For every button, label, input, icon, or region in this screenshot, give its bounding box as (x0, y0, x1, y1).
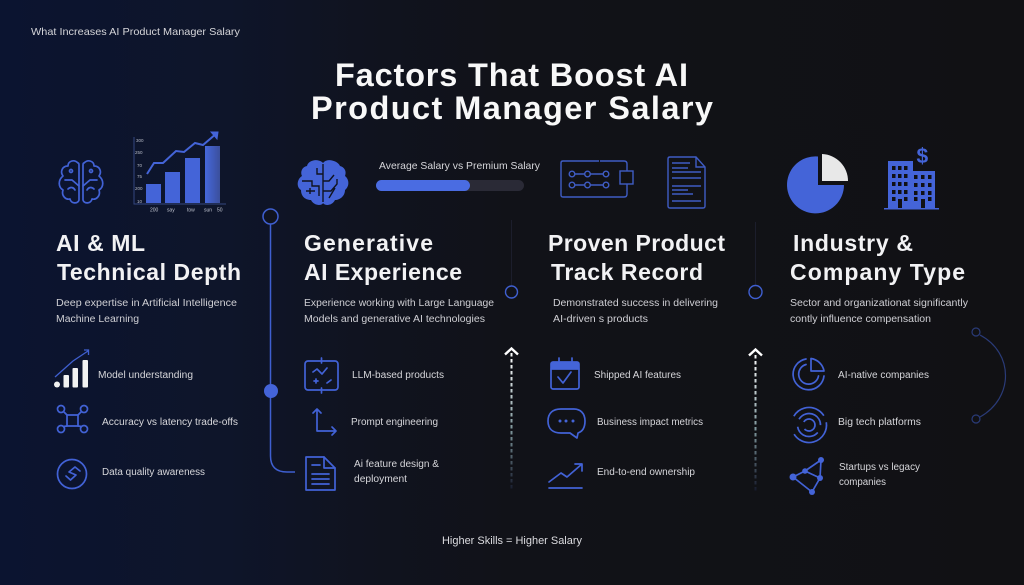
heading: Technical Depth (57, 259, 241, 285)
bar chart with rising arrow: 200 (135, 186, 143, 191)
item: LLM products: LLM-based products (352, 370, 444, 381)
heading: Company Type (790, 259, 965, 285)
heading: Generative (304, 230, 433, 256)
description (790, 298, 968, 325)
item: prompt engineering: Prompt engineering (351, 417, 438, 428)
panel: proven product track record (548, 157, 725, 488)
title: Factors That Boost AI (335, 57, 688, 93)
salary comparison bar (376, 160, 541, 191)
bar chart with rising arrow: sun (204, 208, 212, 214)
bar chart with rising arrow: say (167, 208, 175, 214)
description (304, 298, 494, 325)
heading: Track Record (551, 259, 703, 285)
node on column divider (749, 286, 762, 298)
heading (790, 230, 965, 285)
icon: office building with dollar (884, 145, 939, 210)
item: data quality: Data quality awareness (102, 467, 205, 478)
item: end-to-end ownership: End-to-end ownership (597, 467, 695, 478)
icon: pie chart (787, 154, 848, 213)
bar chart with rising arrow: 50 (217, 208, 223, 214)
description: Sector and organizationat significantly (790, 298, 968, 309)
item: accuracy vs latency (58, 406, 238, 432)
icon: solid brain (298, 160, 348, 205)
description: Models and generative AI technologies (304, 314, 485, 325)
bar chart with rising arrow: 250 (135, 150, 143, 155)
arrow: dashed upward 1 (505, 348, 518, 491)
heading (304, 230, 462, 285)
item: big tech (785, 401, 921, 449)
bar chart with rising arrow: 300 (136, 138, 144, 143)
title: Product Manager Salary (311, 90, 713, 126)
heading (548, 230, 725, 285)
item: end-to-end ownership (549, 464, 695, 488)
description: Deep expertise in Artificial Intelligence (56, 298, 237, 309)
item: feature design: deployment (354, 474, 407, 485)
icon: office building with dollar: $ (916, 145, 928, 168)
bar chart with rising arrow: 75 (137, 174, 143, 179)
panel: industry and company type (785, 145, 1006, 495)
description (56, 298, 237, 325)
description: contly influence compensation (790, 314, 931, 325)
heading: Industry & (793, 230, 913, 256)
heading (56, 230, 241, 285)
heading: AI Experience (304, 259, 462, 285)
item: big tech: Big tech platforms (838, 417, 921, 428)
top label: What Increases AI Product Manager Salary (31, 26, 241, 38)
timeline connector (263, 209, 295, 472)
bar chart with rising arrow: 10 (137, 199, 143, 204)
item: startups vs legacy (790, 457, 920, 495)
item: prompt engineering (313, 409, 438, 435)
icon: circuit board (561, 161, 633, 197)
decorative arc connector (972, 328, 1006, 423)
description: Experience working with Large Language (304, 298, 494, 309)
item: startups vs legacy: Startups vs legacy (839, 462, 920, 473)
item: LLM products (305, 358, 444, 393)
item: AI-native (793, 358, 929, 390)
bar chart with rising arrow: 70 (137, 163, 143, 168)
title (311, 57, 713, 126)
bar chart with rising arrow: tow (187, 208, 195, 214)
item: shipped features: Shipped AI features (594, 370, 681, 381)
item: AI-native: AI-native companies (838, 370, 929, 381)
heading: AI & ML (56, 230, 145, 256)
icon: outlined brain (59, 161, 103, 203)
item: startups vs legacy: companies (839, 477, 886, 488)
item: model understanding: Model understanding (98, 370, 193, 381)
heading: Proven Product (548, 230, 725, 256)
node on column divider (506, 286, 518, 298)
item: model understanding (54, 350, 193, 388)
description: Machine Learning (56, 314, 139, 325)
item: feature design: Ai feature design & (354, 459, 439, 470)
icon: document (668, 157, 705, 208)
footer caption: Higher Skills = Higher Salary (442, 535, 582, 547)
arrow: dashed upward 2 (749, 350, 762, 491)
item: data quality (58, 460, 205, 488)
bar chart with rising arrow: 200 (150, 208, 159, 214)
item: accuracy vs latency: Accuracy vs latency trade-offs (102, 417, 238, 428)
item: feature design (306, 457, 439, 490)
description: Demonstrated success in delivering (553, 298, 718, 309)
item: business impact (548, 409, 703, 438)
panel: generative AI experience (298, 160, 541, 490)
item: business impact: Business impact metrics (597, 417, 703, 428)
panel: AI and ML technical depth (54, 132, 241, 488)
item: shipped features (551, 358, 681, 389)
description (553, 298, 718, 325)
bar chart with rising arrow (134, 132, 226, 214)
salary comparison bar: Average Salary vs Premium Salary (379, 160, 541, 172)
description: AI-driven s products (553, 314, 648, 325)
